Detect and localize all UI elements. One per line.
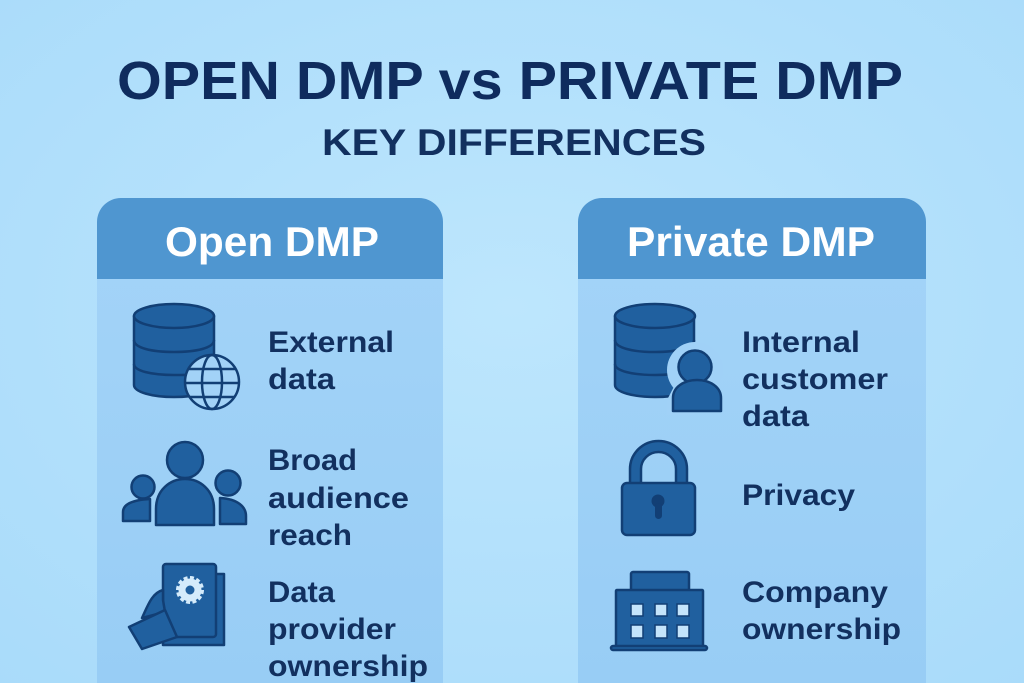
text: broad audience reach [268,444,409,552]
text: data provider ownership: provider [268,613,396,646]
text: data provider ownership: ownership [268,650,428,683]
text: external data [268,326,394,396]
text: company ownership: Company [742,576,888,609]
panel header: open DMP [97,198,443,279]
text: internal customer data [742,326,888,433]
subtitle: KEY DIFFERENCES [322,122,706,163]
text: company ownership [742,576,901,646]
text: company ownership: ownership [742,613,901,646]
heading: open DMP: Open DMP [165,218,379,265]
text: internal customer data: customer [742,363,888,396]
icon: audience [123,442,246,525]
panel header: private DMP [578,198,926,279]
text: data provider ownership: Data [268,576,335,609]
text: external data: External [268,326,394,359]
text: internal customer data: data [742,400,809,433]
panel body: open DMP [97,198,443,683]
panel: open DMP [97,198,443,683]
text: broad audience reach: reach [268,519,352,552]
heading: private DMP: Private DMP [627,218,875,265]
icon: database with globe [134,304,239,409]
text: broad audience reach: audience [268,482,409,515]
icon: database with person [615,304,723,415]
icon: data provider document in hand [129,564,224,649]
text: broad audience reach: Broad [268,444,357,477]
icon: padlock [622,441,695,535]
text: privacy: Privacy [742,479,855,512]
text: data provider ownership [268,576,428,683]
title: OPEN DMP vs PRIVATE DMP [117,51,903,111]
panel: private DMP [578,198,926,683]
text: external data: data [268,363,335,396]
panel body: private DMP [578,198,926,683]
text: internal customer data: Internal [742,326,860,359]
icon: company building [611,572,707,650]
